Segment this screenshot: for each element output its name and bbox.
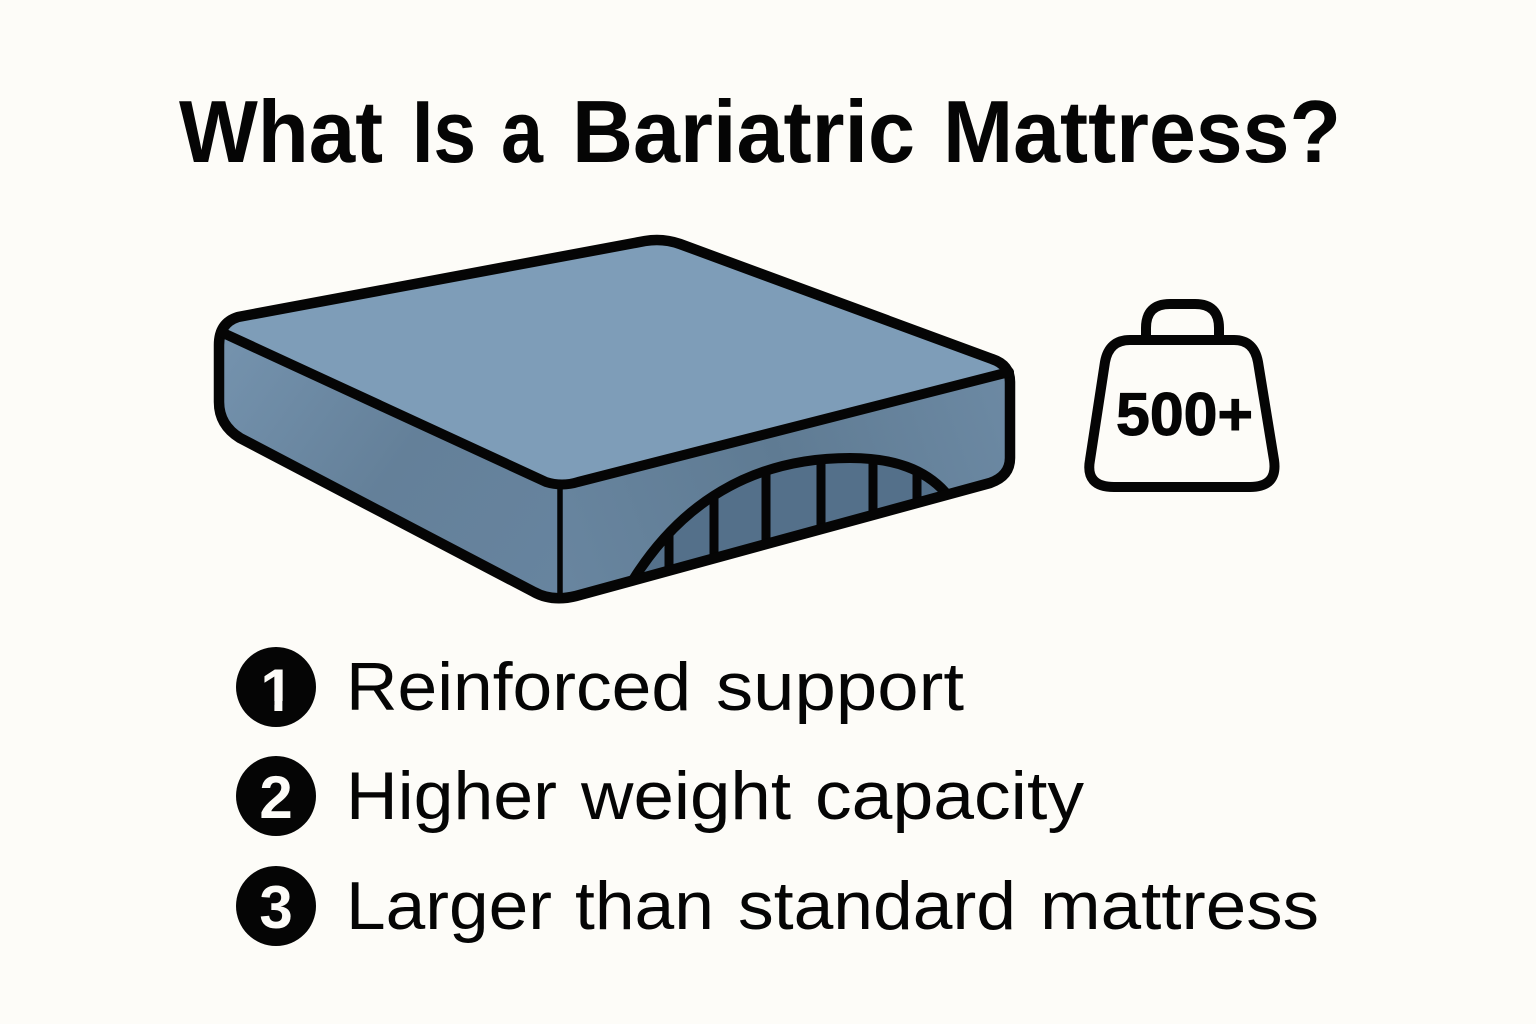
mattress top face [221,240,1009,484]
weight body [1089,340,1274,487]
mattress left side [219,332,560,598]
label: larger than standard mattress: Larger [346,868,552,944]
label: reinforced support: Reinforced [346,649,691,725]
icon: mattress [219,240,1010,598]
mattress top edges [221,332,1009,484]
title: Is [412,82,476,181]
mattress corner line [557,487,563,598]
label: reinforced support: support [716,649,964,725]
title [179,82,1341,181]
list item 3 [236,866,1319,946]
label: larger than standard mattress: mattress [1040,868,1319,944]
label: higher weight capacity [346,758,1084,834]
label: higher weight capacity: weight [580,758,791,834]
digit 3: 3 [259,874,293,941]
label: higher weight capacity: capacity [815,758,1084,834]
digit 1: 1 [260,657,294,724]
badge 3 [236,866,316,946]
label: higher weight capacity: Higher [346,758,557,834]
title: Bariatric [572,82,915,181]
label: larger than standard mattress [346,868,1319,944]
label: reinforced support [346,649,964,725]
mattress outline [219,240,1010,598]
badge 2 [236,756,316,836]
title: What [179,82,383,181]
title: a [501,82,544,181]
digit 2: 2 [259,764,293,831]
title: Mattress? [943,82,1341,181]
label: larger than standard mattress: standard [738,868,1016,944]
badge 1 [236,647,316,727]
list item 1 [236,647,964,727]
reinforced support arch [633,458,945,580]
weight handle [1146,304,1219,338]
weight label: 500+ [1116,381,1253,448]
label: larger than standard mattress: than [575,868,714,944]
list item 2 [236,756,1084,836]
mattress right side [560,372,1010,598]
icon: 500+ weight [1089,304,1274,487]
